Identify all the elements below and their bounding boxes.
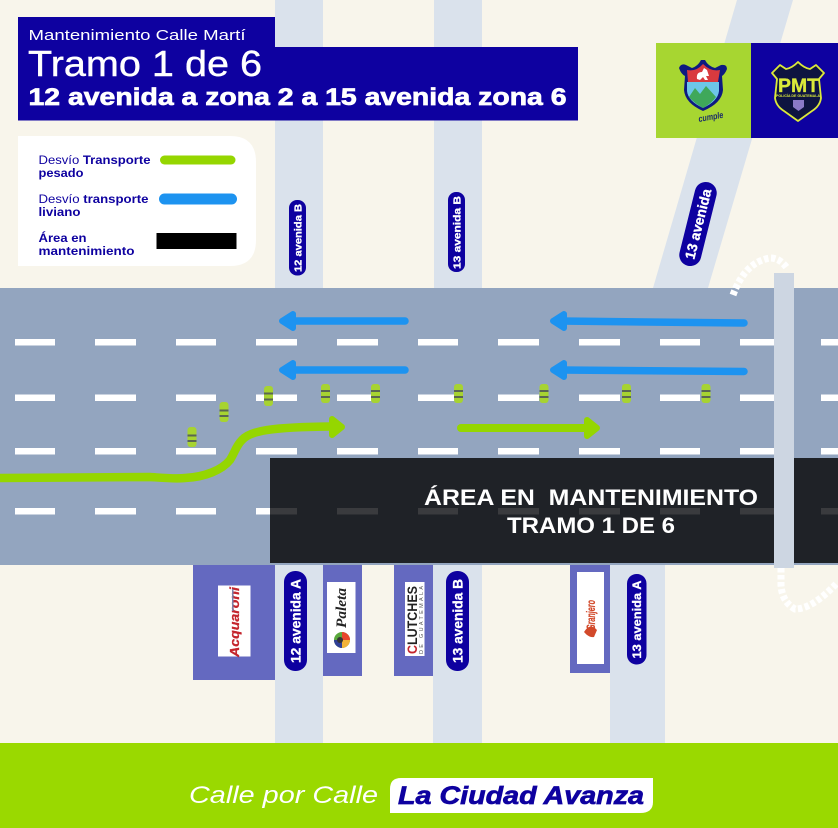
logo panel: PMT <box>751 43 838 138</box>
street label: 13 avenida A: 13 avenida A <box>630 580 644 658</box>
logo panel: PMT: POLICÍA DE GUATEMALA <box>776 93 820 98</box>
overpass and turn markings <box>733 258 836 609</box>
shop: Clutches <box>394 565 433 676</box>
legend: maintenance area: Área en <box>38 232 86 245</box>
legend panel <box>18 136 256 266</box>
legend: heavy transport <box>38 155 236 180</box>
title block <box>18 17 578 120</box>
street label: 12 avenida A: 12 avenida A <box>288 579 304 663</box>
street label: 12 avenida A <box>284 571 307 671</box>
maintenance area: TRAMO 1 DE 6 <box>507 513 675 538</box>
shop: Pollo Granjero: Granjero <box>586 600 598 630</box>
legend: maintenance area <box>38 232 236 258</box>
maintenance area <box>270 458 838 563</box>
subtitle: Mantenimiento Calle Martí <box>28 27 247 44</box>
slogan badge <box>390 778 653 813</box>
traffic cones <box>188 384 710 447</box>
legend: maintenance area: mantenimiento <box>38 246 134 258</box>
street label: 13 avenida B <box>448 192 465 272</box>
logo panel: PMT: PMT <box>778 76 819 97</box>
legend: light transport: Desvío transporte <box>38 194 148 206</box>
shop: Acquaroni: Acquaroni <box>227 587 242 658</box>
legend: heavy transport: Desvío Transporte <box>38 155 150 167</box>
blue arrows: light transport detour <box>282 314 744 377</box>
shop: Paleta <box>323 565 362 676</box>
slogan: Calle por Calle <box>189 782 378 809</box>
footer band: La Ciudad Avanza <box>398 782 644 810</box>
shop: Pollo Granjero <box>570 565 610 673</box>
footer band <box>0 743 838 828</box>
street label: 13 avenida B: 13 avenida B <box>452 196 464 269</box>
main title: Tramo 1 de 6 <box>28 43 262 84</box>
route: 12 avenida a zona 2 a 15 avenida zona 6 <box>28 84 566 111</box>
green arrows: heavy transport detour <box>0 419 597 478</box>
side streets <box>275 0 793 745</box>
legend: light transport: liviano <box>38 207 80 219</box>
legend: heavy transport: pesado <box>38 168 84 180</box>
main road <box>0 288 838 565</box>
street label: 12 avenida B: 12 avenida B <box>292 204 304 272</box>
shop: Clutches: CLUTCHES <box>404 586 420 654</box>
street label: 13 avenida diagonal <box>677 180 719 268</box>
shop: Paleta: Paleta <box>334 587 350 628</box>
street label: 13 avenida diagonal: 13 avenida <box>682 187 715 261</box>
maintenance area: ÁREA EN MANTENIMIENTO <box>424 485 758 510</box>
street label: 13 avenida A <box>627 574 646 664</box>
logo panel: municipality: cumple <box>698 110 724 124</box>
shop: Clutches: DE GUATEMALA <box>419 586 425 654</box>
street label: 13 avenida B bottom: 13 avenida B <box>450 579 466 663</box>
street label: 12 avenida B <box>289 200 306 276</box>
logo panel: municipality <box>656 43 751 138</box>
shop: Acquaroni <box>193 565 275 680</box>
legend: light transport <box>38 194 237 219</box>
street label: 13 avenida B bottom <box>446 571 469 671</box>
